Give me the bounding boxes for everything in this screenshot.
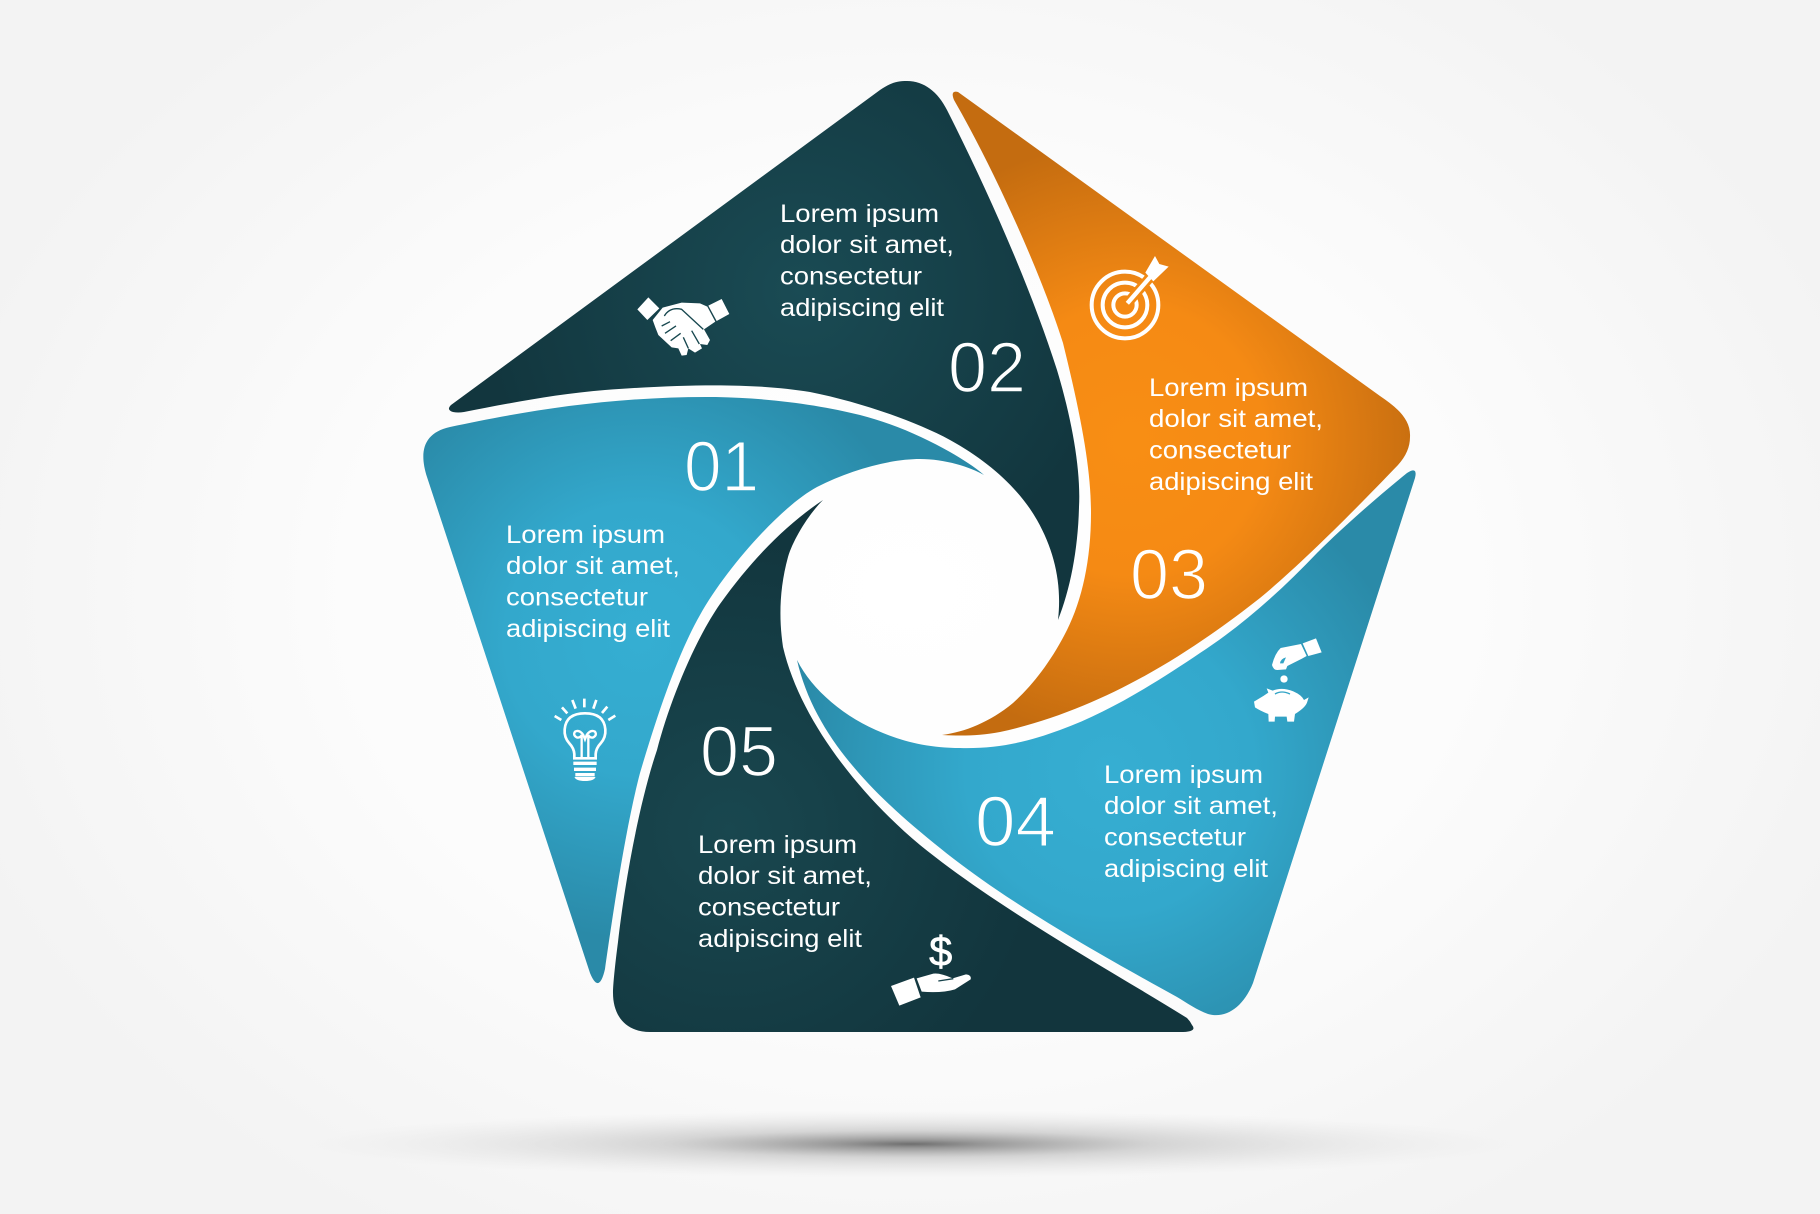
text: segment 01: Lorem ipsum [506, 521, 665, 549]
text: segment 04: Lorem ipsum [1104, 761, 1263, 789]
text: segment 01: dolor sit amet, [506, 552, 680, 580]
text: segment 05: adipiscing elit [698, 925, 862, 953]
text: segment 04: dolor sit amet, [1104, 792, 1278, 820]
text: segment 02: consectetur [780, 262, 922, 290]
text: segment 03: dolor sit amet, [1149, 405, 1323, 433]
shape: segment 03 [942, 92, 1410, 736]
number 04: 04 [975, 783, 1056, 862]
panel: segment 02 [449, 81, 1079, 620]
icon: hand with dollar: $ [929, 927, 952, 974]
text: segment 02 [780, 200, 954, 322]
panel: segment 04 [797, 470, 1416, 1015]
text: segment 01: consectetur [506, 584, 648, 612]
text: segment 02: adipiscing elit [780, 294, 944, 322]
icon: hand with dollar [891, 927, 971, 1006]
text: segment 02: dolor sit amet, [780, 231, 954, 259]
number 02: 02 [948, 329, 1026, 408]
shape: segment 01 [423, 397, 984, 983]
text: segment 05: consectetur [698, 894, 840, 922]
text: segment 05: dolor sit amet, [698, 862, 872, 890]
icon: hand and piggy bank [1254, 638, 1322, 722]
icon: target with arrow [1092, 256, 1169, 338]
panel: segment 01 [423, 397, 984, 983]
number 05: 05 [700, 713, 778, 792]
text: segment 03: Lorem ipsum [1149, 374, 1308, 402]
text: segment 04 [1104, 761, 1278, 883]
icon: light bulb [555, 699, 615, 781]
icon: handshake [637, 297, 729, 356]
panel: segment 03 [942, 92, 1410, 736]
text: segment 05 [698, 831, 872, 953]
number 01: 01 [684, 428, 759, 507]
shape: segment 04 [797, 470, 1416, 1015]
text: segment 04: consectetur [1104, 824, 1246, 852]
text: segment 02: Lorem ipsum [780, 200, 939, 228]
text: segment 03 [1149, 374, 1323, 496]
shape: segment 02 [449, 81, 1079, 620]
floor shadow [301, 1110, 1521, 1178]
text: segment 04: adipiscing elit [1104, 855, 1268, 883]
shape: segment 05 [613, 500, 1194, 1032]
number 03: 03 [1130, 536, 1208, 615]
text: segment 03: adipiscing elit [1149, 468, 1313, 496]
panel: segment 05 [613, 500, 1194, 1032]
text: segment 01: adipiscing elit [506, 615, 670, 643]
text: segment 03: consectetur [1149, 436, 1291, 464]
text: segment 01 [506, 521, 680, 643]
text: segment 05: Lorem ipsum [698, 831, 857, 859]
